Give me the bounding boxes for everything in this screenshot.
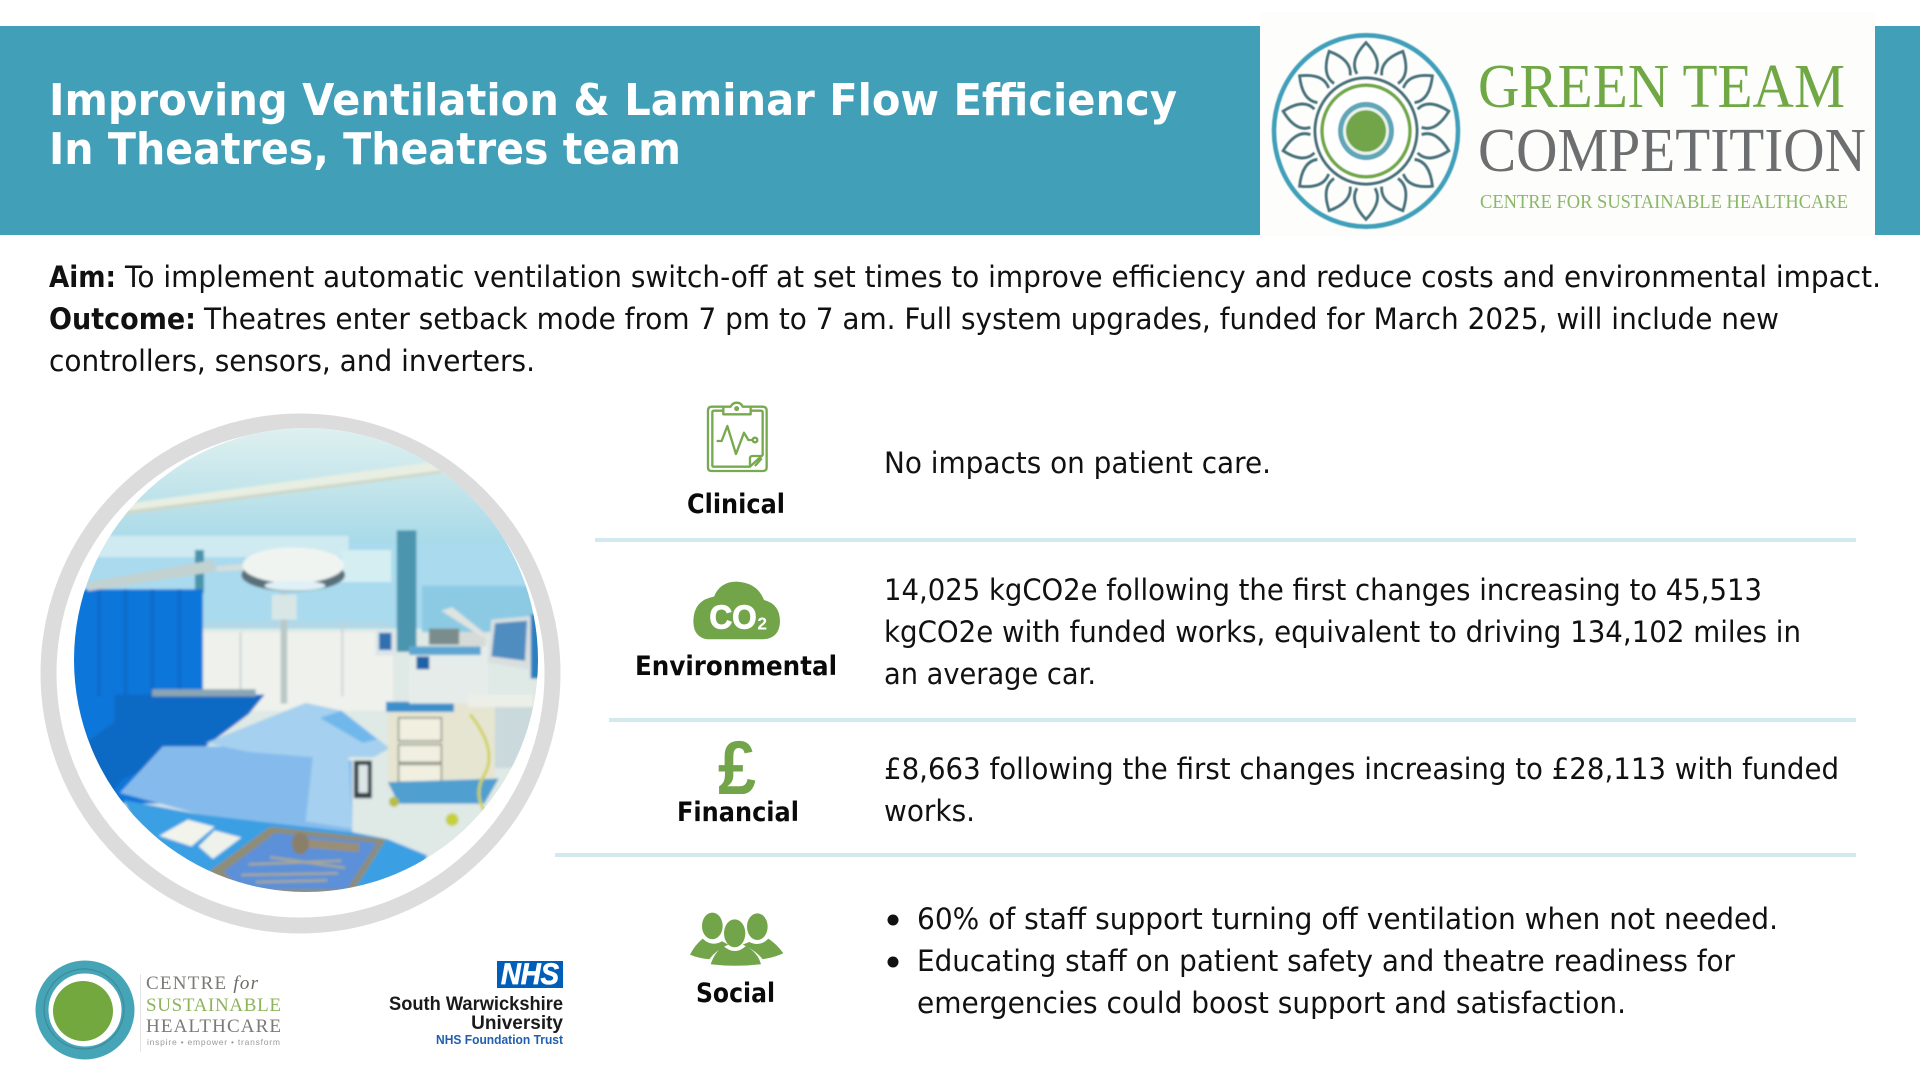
financial text: works. xyxy=(884,794,975,828)
lamp xyxy=(240,569,346,593)
CSH wordmark: SUSTAINABLE xyxy=(146,995,281,1016)
ceiling and wall xyxy=(110,428,507,544)
column xyxy=(397,530,416,652)
logo text: GREEN TEAM xyxy=(1478,53,1845,121)
icon: CO2 cloud: 2 xyxy=(757,613,767,633)
icon: pound sign: £ xyxy=(718,726,756,811)
title xyxy=(49,75,1177,175)
logo: Green Team Competition xyxy=(1260,12,1875,236)
CSH wordmark: HEALTHCARE xyxy=(146,1016,281,1037)
social bullets xyxy=(888,902,1778,1020)
equipment table xyxy=(88,692,266,790)
logo: Centre for Sustainable Healthcare xyxy=(42,967,281,1053)
logo: NHS South Warwickshire: South Warwickshire xyxy=(389,994,563,1015)
row: financial xyxy=(677,726,1839,828)
icon: CO2 cloud: CO xyxy=(709,600,757,637)
row: environmental xyxy=(635,573,1801,691)
row: social: Social xyxy=(696,978,775,1009)
icon: NHS lozenge: NHS xyxy=(501,958,559,991)
floor equipment xyxy=(354,761,372,798)
IV pole xyxy=(281,593,287,704)
environmental text xyxy=(884,573,1801,691)
logo: NHS South Warwickshire: University xyxy=(471,1013,563,1034)
CSH wordmark: CENTRE for xyxy=(146,973,259,994)
draped patient xyxy=(206,703,390,829)
logo text: COMPETITION xyxy=(1478,117,1866,185)
monitor xyxy=(488,616,531,670)
logo text: CENTRE FOR SUSTAINABLE HEALTHCARE xyxy=(1480,192,1848,213)
text block: aim and outcome: controllers, sensors, and inverters. xyxy=(49,344,535,378)
text block: aim and outcome: Aim: xyxy=(49,260,116,294)
lamp arm xyxy=(88,560,216,591)
CSH wordmark xyxy=(146,973,281,1047)
icon: sunflower emblem xyxy=(1274,35,1458,227)
row: social xyxy=(690,902,1778,1020)
logo: NHS South Warwickshire: NHS Foundation Trust xyxy=(436,1032,564,1047)
bottom sheet xyxy=(124,800,427,900)
row: environmental: Environmental xyxy=(635,651,837,682)
lower sheet xyxy=(120,746,352,832)
screens xyxy=(200,632,393,711)
social bullets: 60% of staff support turning off ventilation when not needed. xyxy=(917,902,1778,936)
text block: aim and outcome: Theatres enter setback mode from 7 pm to 7 am. Full system upgrades, funded for March 2025, will include new xyxy=(203,302,1779,336)
icon: three people xyxy=(690,913,783,966)
title: In Theatres, Theatres team xyxy=(49,124,681,175)
text block: aim and outcome xyxy=(49,260,1881,378)
environmental text: 14,025 kgCO2e following the first changes increasing to 45,513 xyxy=(884,573,1762,607)
row: financial: Financial xyxy=(677,797,799,828)
photo: operating theatre xyxy=(63,418,549,900)
row: clinical xyxy=(687,403,1271,520)
social bullets: Educating staff on patient safety and theatre readiness for xyxy=(917,944,1735,978)
text block: aim and outcome: To implement automatic ventilation switch-off at set times to improve efficiency and reduce costs and environmental impact. xyxy=(124,260,1881,294)
logo: NHS South Warwickshire xyxy=(389,958,564,1047)
instrument tray xyxy=(209,827,386,893)
title: Improving Ventilation & Laminar Flow Efficiency xyxy=(49,75,1177,126)
text block: aim and outcome: Outcome: xyxy=(49,302,196,336)
row: clinical: Clinical xyxy=(687,489,785,520)
environmental text: kgCO2e with funded works, equivalent to driving 134,102 miles in xyxy=(884,615,1801,649)
icon: clipboard with pulse xyxy=(708,403,767,471)
anaesthesia machine xyxy=(388,704,495,789)
financial text xyxy=(884,752,1839,828)
row: clinical: No impacts on patient care. xyxy=(884,446,1271,480)
social bullets: emergencies could boost support and satisfaction. xyxy=(917,986,1626,1020)
icon: CO2 cloud xyxy=(693,582,780,639)
CSH wordmark: inspire • empower • transform xyxy=(147,1037,280,1047)
logo text xyxy=(1478,53,1866,213)
financial text: £8,663 following the first changes increasing to £28,113 with funded xyxy=(884,752,1839,786)
curtain xyxy=(66,589,203,804)
environmental text: an average car. xyxy=(884,657,1096,691)
icon: CSH circle xyxy=(42,967,128,1053)
header band xyxy=(0,26,1920,235)
photo ring xyxy=(48,422,552,926)
